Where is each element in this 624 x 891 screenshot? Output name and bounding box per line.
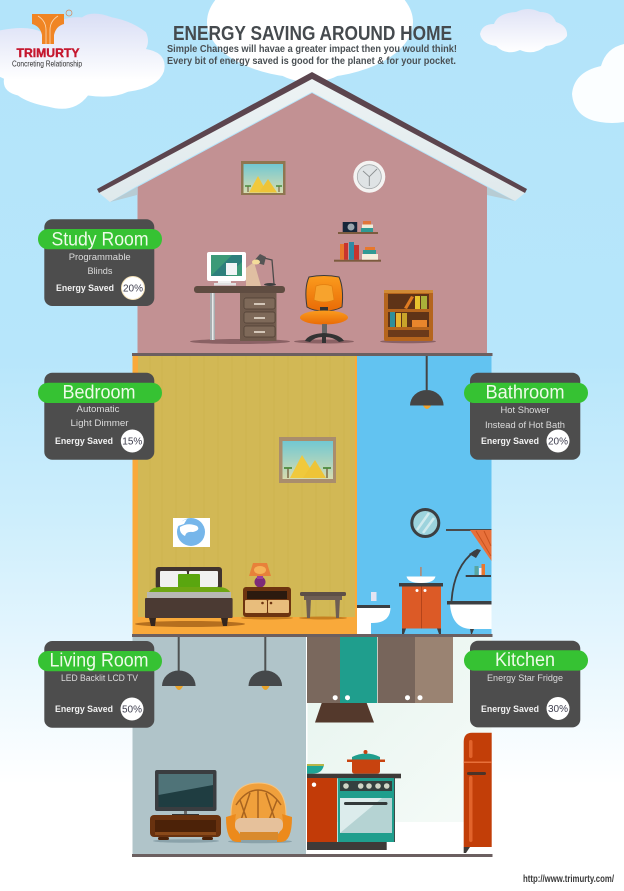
logo [12,10,82,68]
energy saved label: Energy Saved [481,436,539,447]
logo mark [32,10,72,44]
bowl [307,764,324,774]
energy saved label: Energy Saved [56,283,114,294]
picture: study room [241,161,286,195]
bathtub [447,601,492,634]
label: study room [38,229,162,249]
shelf: books [334,242,381,262]
round mirror [412,510,439,536]
stove and counter [307,774,401,850]
logo tagline: Concreting Relationship [12,58,82,68]
nightstand with lamp [241,563,293,620]
percent badge: 20% [548,436,568,448]
lamp light [246,262,261,286]
peacock armchair [226,783,292,843]
room name: Study Room [52,230,148,250]
globe poster [173,518,210,547]
toilet [357,592,390,634]
office chair [294,276,354,344]
logo wordmark: TRIMURTY [16,46,80,60]
percent badge: 50% [122,704,142,716]
kitchen wall cabinets [307,637,453,703]
stool [299,592,347,620]
room name: Living Room [50,650,148,672]
energy saved label: Energy Saved [481,704,539,715]
bathroom pendant lamp [410,356,444,409]
percent badge: 15% [122,436,142,448]
monitor [207,252,246,286]
cooker hood [315,703,374,722]
percent badge: 30% [548,704,568,715]
label: bedroom [38,383,162,403]
living room pendant lamp 2 [248,637,282,690]
house roof [97,72,527,202]
tip: study room: Programmable [69,252,131,263]
cloud: top left behind logo [0,14,165,109]
cloud: top right small [480,9,567,52]
cooking pot [347,750,385,774]
panel: study room wall [138,93,487,353]
shower curtain [446,529,492,561]
floor beams [132,353,492,857]
tip: living room: LED Backlit LCD TV [61,673,139,684]
bookcase [380,290,436,343]
energy saved label: Energy Saved [55,704,113,715]
card: study room [38,219,162,306]
panel: bathroom [357,356,492,634]
subtitle line 2: Every bit of energy saved is good for the planet & for your pocket. [167,55,456,67]
room name: Kitchen [495,650,555,671]
room name: Bedroom [62,382,136,404]
label: kitchen [464,650,588,671]
label: bathroom [464,383,588,403]
panel: living room [132,637,306,854]
card: kitchen [464,641,588,727]
tip: bathroom: Hot Shower [500,405,550,416]
card: bathroom [464,373,588,460]
tip line 2: Instead of Hot Bath [485,420,565,431]
cloud: top centre [207,0,413,82]
subtitle line 1: Simple Changes will havae a greater impact then you would think! [167,43,457,55]
living room pendant lamp 1 [162,637,196,690]
label: living room [38,651,162,671]
tip line 2: Light Dimmer [70,418,128,429]
card: living room [38,641,162,728]
fridge [464,733,492,853]
tip: bedroom: Automatic [76,404,120,415]
bath shelf [466,564,491,577]
desk lamp [252,254,276,286]
title: ENERGY SAVING AROUND HOME [173,23,452,45]
icon: wall clock [353,161,385,193]
shower pipe [452,549,481,601]
cloud: far right [572,44,624,123]
shelf: camera and books [338,221,378,234]
panel: bedroom [132,356,357,634]
card: bedroom [38,373,162,460]
tip: kitchen: Energy Star Fridge [487,673,563,684]
study desk with monitor and lamp [190,252,290,344]
sink cabinet [399,567,443,634]
television on stand [150,770,221,843]
energy saved label: Energy Saved [55,436,113,447]
percent badge: 20% [123,284,143,294]
bed [135,567,245,627]
picture: bedroom [279,437,336,483]
panel: kitchen [306,637,492,854]
room name: Bathroom [486,382,564,404]
tip line 2: Blinds [88,266,113,277]
